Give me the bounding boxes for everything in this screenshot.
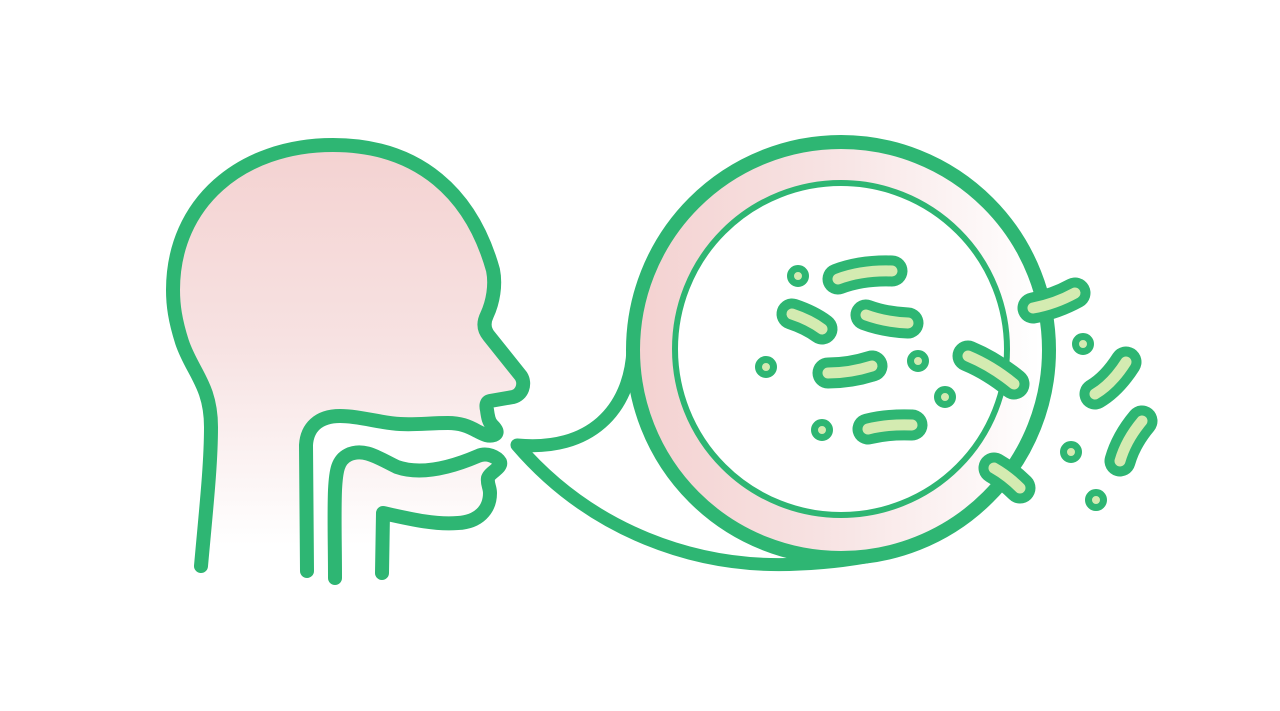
inner circle — [675, 183, 1007, 515]
lower jaw and throat outline — [335, 452, 500, 578]
magnifier circle ring — [633, 142, 1049, 558]
rod outlines — [792, 271, 1142, 488]
bacteria dots — [758, 268, 1104, 508]
head and upper airway outline — [173, 145, 523, 571]
head silhouette — [173, 145, 523, 578]
bacteria rods — [792, 271, 1142, 488]
speech bubble tail — [517, 350, 895, 565]
rod centres — [792, 271, 1142, 488]
